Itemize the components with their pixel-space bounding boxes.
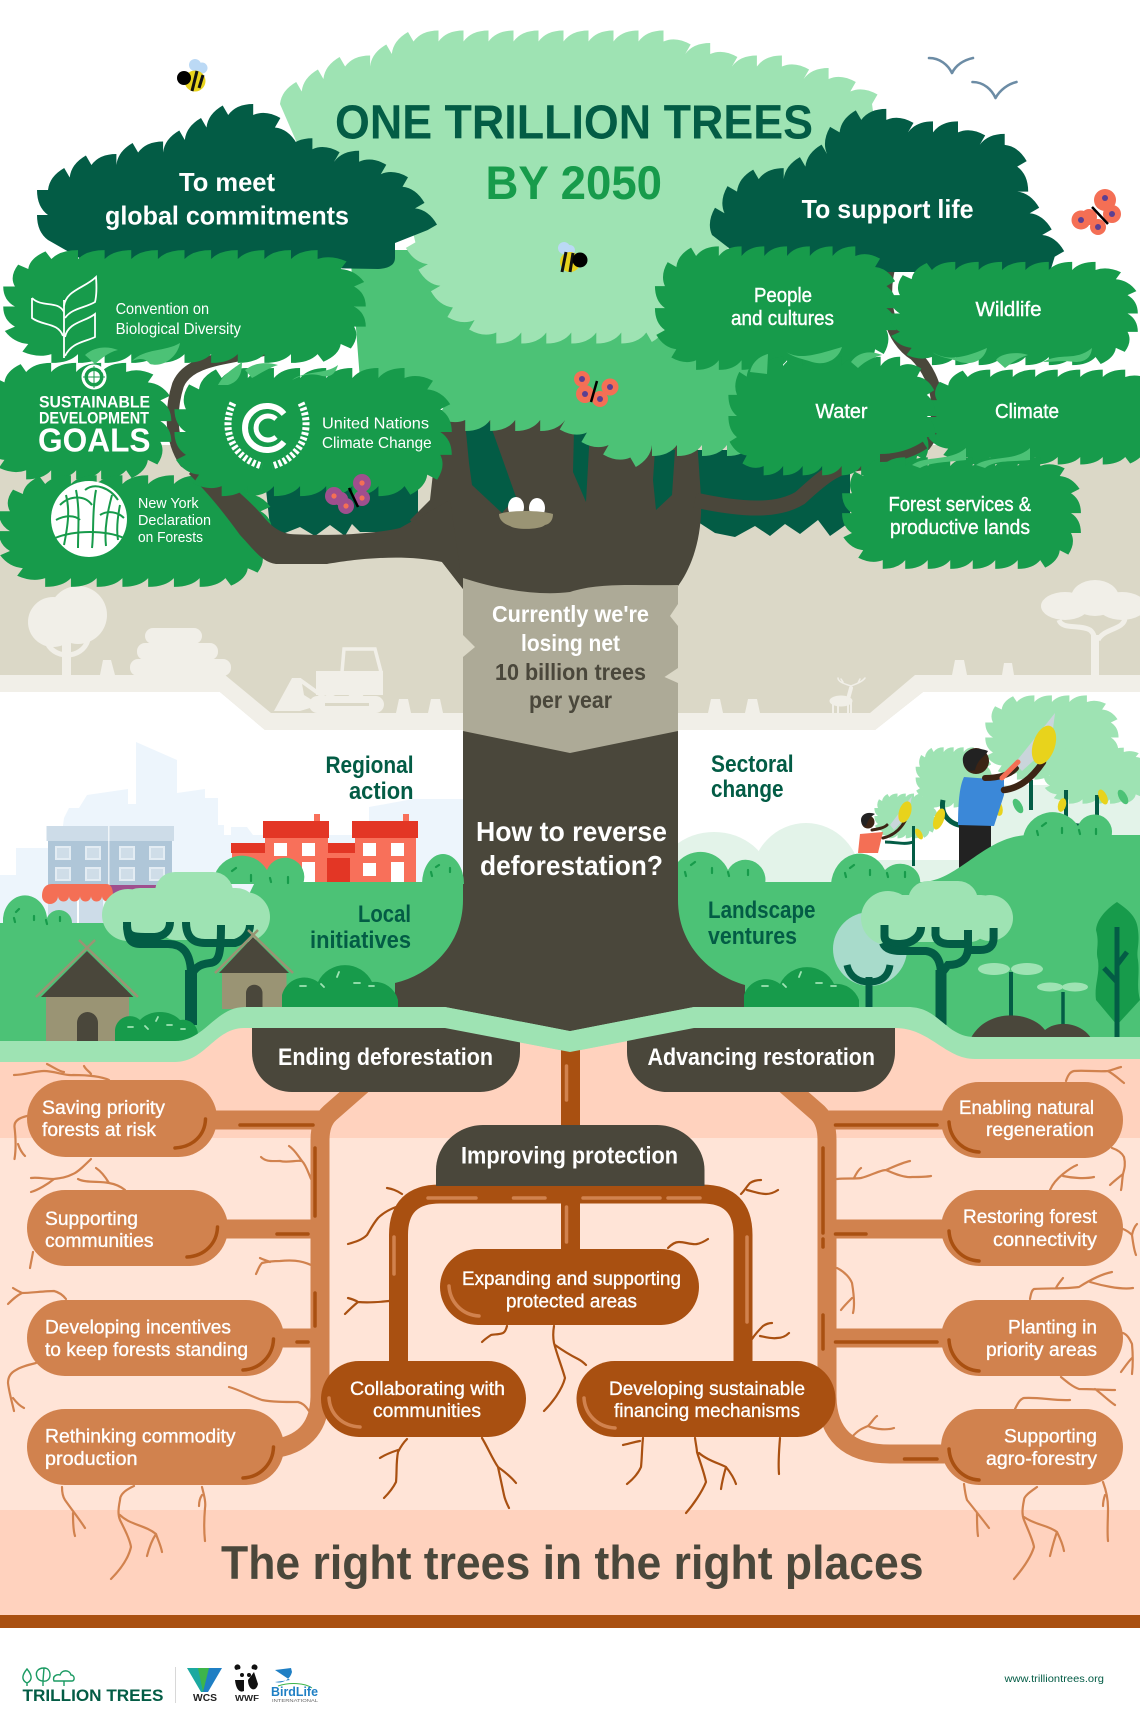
panel: foreground landscapes [0, 812, 1140, 1050]
pill: supporting communities [27, 1190, 228, 1266]
skyline [0, 742, 463, 960]
header: advancing restoration: Advancing restoration [648, 1044, 875, 1071]
label: regional action [326, 752, 414, 805]
panel: advancing restoration roots [786, 1067, 1137, 1579]
header: improving protection [436, 1125, 704, 1186]
heading: how to reverse deforestation [476, 816, 667, 881]
panel: soil background [0, 1020, 1140, 1628]
light bushes [3, 812, 1112, 923]
pill: restoring forest connectivity: Restoring forest [963, 1206, 1098, 1228]
logo: WCS: WCS [193, 1692, 217, 1704]
central taproot [561, 1040, 580, 1130]
logo: New York Declaration on Forests [51, 481, 211, 557]
pill: saving priority forests [27, 1080, 217, 1157]
foliage: UNFCCC [174, 368, 452, 496]
pill: supporting agro-forestry [941, 1409, 1123, 1485]
title: BY 2050 [486, 156, 662, 209]
logo: BirdLife [271, 1668, 319, 1703]
left hill [0, 882, 463, 1050]
panel: commitments foliage [0, 250, 463, 589]
logo: Trillion Trees [22, 1668, 164, 1705]
panel: tree trunk and branches [173, 265, 937, 1040]
logo: UN Climate Change: United Nations [322, 416, 429, 433]
title [335, 96, 813, 209]
panel: deforested land [0, 445, 1140, 780]
logo: BirdLife: INTERNATIONAL [272, 1698, 319, 1703]
icon: faded tree [28, 586, 107, 676]
left huts [36, 930, 293, 1043]
logo: Convention on Biological Diversity: Convention on [116, 301, 209, 318]
saplings [970, 963, 1092, 1040]
heading text: global commitments [105, 201, 349, 231]
foliage: forest services [842, 457, 1081, 569]
dark green bushes [115, 965, 859, 1043]
medium canopy [350, 250, 752, 467]
logo: WCS [187, 1668, 222, 1704]
pill: planting in priority areas: priority areas [986, 1339, 1097, 1361]
right pale tree [833, 912, 907, 1009]
pill: supporting agro-forestry: Supporting [1004, 1425, 1097, 1447]
tendrils right [837, 1067, 1137, 1579]
header: advancing restoration [627, 1020, 895, 1092]
lower left branch [189, 461, 463, 589]
left light tree [102, 872, 270, 1025]
label: landscape ventures [708, 897, 816, 950]
root accents left [240, 1125, 315, 1342]
pill: collaborating with communities: Collaborating with [350, 1378, 505, 1400]
right light tree [861, 881, 1013, 1025]
label: landscape ventures: ventures [708, 923, 797, 950]
pill: enabling natural regeneration: Enabling natural [959, 1097, 1094, 1119]
pill: expanding protected areas [440, 1249, 699, 1325]
foliage: CBD [3, 250, 366, 363]
panel: ending deforestation roots [8, 1064, 362, 1579]
heading text: To meet [179, 167, 275, 197]
right hill [678, 835, 1140, 1045]
pill: supporting communities: communities [45, 1230, 154, 1252]
panel: left city scene [0, 742, 463, 960]
foliage: water [728, 357, 935, 475]
label: local initiatives [310, 901, 411, 954]
heading text [105, 167, 349, 231]
icon: child worker [858, 796, 914, 853]
orchard trunks and fruit [885, 780, 1130, 866]
logo: New York Declaration on Forests: on Forests [138, 530, 203, 546]
foliage: forest services: Forest services & [888, 494, 1032, 516]
trunk tip between headers [445, 1006, 694, 1031]
root network left [210, 1085, 362, 1448]
loss statement: losing net [521, 630, 620, 656]
loss statement [492, 601, 649, 713]
label: landscape ventures: Landscape [708, 897, 816, 924]
website: www.trilliontrees.org [1003, 1673, 1104, 1685]
logo: Sustainable Development Goals [38, 366, 150, 459]
loss statement: per year [529, 687, 612, 713]
panel: life foliage [655, 246, 1140, 569]
foliage: people and cultures: People [754, 285, 812, 307]
dark shards [464, 411, 675, 513]
root network right [786, 1085, 945, 1454]
icon: butterfly centre [574, 371, 618, 407]
logo: Sustainable Development Goals: DEVELOPMENT [39, 409, 150, 428]
title: ONE TRILLION TREES [335, 96, 813, 150]
panel: improving protection roots [321, 1040, 836, 1513]
pill: saving priority forests: Saving priority [42, 1097, 165, 1119]
label: regional action: action [349, 778, 414, 805]
panel: to meet global commitments [37, 104, 437, 269]
panel: sectoral change background [658, 695, 1140, 937]
pill: collaborating with communities: communities [373, 1400, 481, 1422]
pill: expanding protected areas: protected areas [506, 1290, 637, 1312]
logo: New York Declaration on Forests: Declaration [138, 513, 211, 529]
label: local initiatives: Local [358, 901, 411, 928]
grey-blue buildings [42, 826, 174, 930]
icon: deer [830, 678, 865, 713]
root arch [398, 1194, 743, 1370]
logo: BirdLife: BirdLife [271, 1684, 318, 1699]
root accents right [823, 1125, 937, 1459]
foliage: SDG [0, 363, 171, 479]
pill: planting in priority areas: Planting in [1008, 1317, 1097, 1339]
ground strip edge over headers [244, 1007, 895, 1052]
dark foliage behind trunk [265, 450, 850, 537]
header: ending deforestation [252, 1020, 520, 1092]
pill: expanding protected areas: Expanding and supporting [462, 1268, 681, 1290]
heading: how to reverse deforestation: deforestation? [480, 850, 663, 881]
foliage: climate [927, 370, 1140, 464]
footer [22, 1664, 1104, 1705]
icon: birds [929, 58, 1016, 98]
pill: enabling natural regeneration [941, 1082, 1123, 1158]
foliage: wildlife [890, 262, 1138, 365]
icon: butterfly right [1072, 189, 1121, 235]
icon: bee centre [558, 242, 588, 272]
pill: restoring forest connectivity: connectivity [993, 1229, 1097, 1251]
label: sectoral change [711, 751, 794, 803]
loss statement: 10 billion trees [495, 659, 646, 685]
logo: UN Climate Change [228, 403, 432, 466]
foliage: New York Declaration [0, 475, 272, 587]
leaf tree [1096, 902, 1140, 1040]
logo: Convention on Biological Diversity: Biological Diversity [116, 321, 241, 338]
pill: saving priority forests: forests at risk [42, 1119, 156, 1141]
pill: rethinking commodity production [27, 1409, 284, 1485]
logo: Sustainable Development Goals: SUSTAINABLE [39, 393, 150, 412]
heading text: To support life [802, 194, 974, 224]
label: regional action: Regional [326, 752, 414, 779]
icon: adult worker [958, 713, 1061, 870]
loss statement: Currently we're [492, 601, 649, 627]
logo: WWF: WWF [235, 1694, 259, 1703]
pill: rethinking commodity production: production [45, 1448, 138, 1470]
panel: canopy [280, 30, 880, 467]
foliage: water: Water [816, 401, 868, 423]
foliage: climate: Climate [995, 401, 1059, 423]
heading: how to reverse deforestation: How to reverse [476, 816, 667, 847]
orchard foliage [874, 695, 1140, 838]
leaf accents [85, 343, 338, 385]
light leaf dashes [14, 823, 1096, 924]
pill: enabling natural regeneration: regeneration [986, 1119, 1094, 1141]
pill: collaborating with communities [321, 1361, 526, 1437]
icon: bulldozer [274, 649, 384, 713]
light canopy [280, 30, 880, 344]
logo: Convention on Biological Diversity [32, 277, 241, 358]
panel: ground strip [0, 1007, 1140, 1062]
foliage: wildlife: Wildlife [976, 299, 1042, 321]
panel: trunk band [463, 578, 678, 753]
label: sectoral change: change [711, 776, 784, 803]
foliage: people and cultures: and cultures [731, 308, 834, 330]
branches [173, 265, 937, 462]
pill: developing financing mechanisms [576, 1361, 836, 1437]
logo: Trillion Trees: TRILLION TREES [22, 1687, 164, 1705]
header: improving protection: Improving protection [461, 1143, 678, 1170]
red building [231, 814, 418, 884]
pill: supporting communities: Supporting [45, 1208, 138, 1230]
trunk body [340, 410, 800, 1040]
icon: butterfly purple [325, 474, 371, 514]
tendrils left [8, 1064, 311, 1579]
pill: developing incentives: Developing incentives [45, 1317, 231, 1339]
icon: nest with eggs [499, 497, 553, 529]
label: sectoral change: Sectoral [711, 751, 794, 778]
foliage: people and cultures [655, 246, 896, 370]
pill: restoring forest connectivity [941, 1190, 1123, 1266]
logo: WWF [234, 1664, 259, 1703]
header: ending deforestation: Ending deforestation [278, 1044, 493, 1071]
logo: Sustainable Development Goals: GOALS [38, 422, 150, 459]
heading: the right trees in the right places: The right trees in the right places [221, 1536, 924, 1589]
pill: rethinking commodity production: Rethinking commodity [45, 1425, 236, 1447]
pill: supporting agro-forestry: agro-forestry [986, 1448, 1097, 1470]
branch fragment over foliage [880, 445, 925, 458]
icon: faded acacia [1041, 580, 1140, 675]
pill: developing financing mechanisms: financing mechanisms [614, 1400, 800, 1422]
icon: bee left [177, 59, 208, 92]
label: local initiatives: initiatives [310, 927, 411, 954]
pill: developing incentives [27, 1300, 284, 1376]
pill: developing incentives: to keep forests standing [45, 1339, 248, 1361]
pill: planting in priority areas [941, 1300, 1123, 1376]
foliage: forest services: productive lands [890, 517, 1030, 539]
tendrils centre [345, 1180, 789, 1513]
logo: New York Declaration on Forests: New York [138, 496, 199, 512]
icon: tree stumps [396, 660, 1014, 713]
pill: developing financing mechanisms: Developing sustainable [609, 1378, 805, 1400]
icon: log pile [100, 628, 231, 676]
panel: to support life [710, 109, 1064, 272]
root highlights [394, 1066, 747, 1322]
leaf accents [750, 347, 1092, 468]
logo: UN Climate Change: Climate Change [322, 435, 432, 452]
